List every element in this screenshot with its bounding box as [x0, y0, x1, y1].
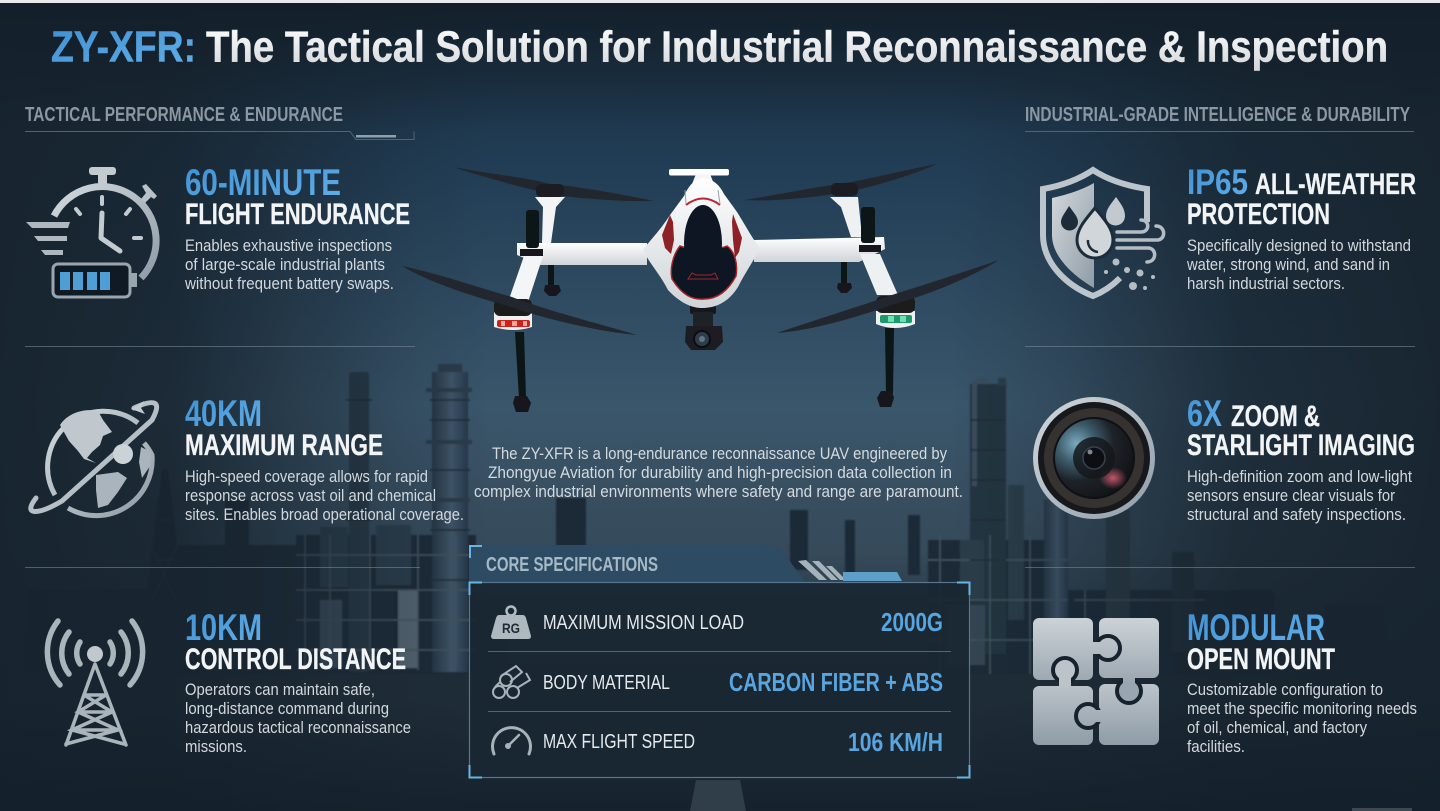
front propellers	[402, 260, 999, 335]
left column heading: TACTICAL PERFORMANCE & ENDURANCE	[25, 104, 343, 126]
top fin	[669, 169, 729, 184]
panel tab	[469, 545, 805, 582]
row: max flight speed: 106 KM/H	[848, 727, 943, 757]
icon: camera lens	[1033, 397, 1155, 519]
feature: 6x zoom and starlight imaging: structural and safety inspections.	[1187, 505, 1406, 524]
fuselage	[643, 178, 760, 308]
feature: modular open mount	[1033, 607, 1417, 756]
feature: 6x zoom and starlight imaging	[1033, 393, 1415, 524]
feature: 40km maximum range: High-speed coverage allows for rapid	[185, 467, 428, 486]
feature: 60-minute flight endurance: Enables exhaustive inspections	[185, 236, 392, 255]
front motors with position lights	[494, 296, 915, 330]
icon: radio tower	[47, 621, 143, 745]
intro paragraph: complex industrial environments where safety and range are paramount.	[474, 482, 963, 501]
row: maximum mission load: 2000G	[881, 607, 943, 637]
drone illustration	[402, 164, 999, 412]
feature: 40km maximum range	[31, 393, 464, 524]
rear propellers and motors	[453, 164, 937, 201]
feature: 10km control distance: 10KM	[185, 607, 262, 648]
feature: 60-minute flight endurance: FLIGHT ENDURANCE	[185, 198, 410, 231]
left column heading	[25, 104, 414, 140]
feature: 10km control distance: Operators can maintain safe,	[185, 680, 375, 699]
watermark remnant	[1352, 808, 1412, 811]
feature: 10km control distance: missions.	[185, 737, 247, 756]
intro paragraph: Zhongyue Aviation for durability and high-precision data collection in	[488, 463, 952, 482]
row: maximum mission load	[491, 606, 943, 639]
top white edge	[0, 0, 1440, 3]
row: body material: BODY MATERIAL	[543, 672, 670, 694]
row: maximum mission load: RG	[502, 620, 520, 636]
feature: modular open mount: of oil, chemical, and factory	[1187, 718, 1367, 737]
row: max flight speed: MAX FLIGHT SPEED	[543, 731, 695, 753]
feature: IP65 all-weather protection: water, strong wind, and sand in	[1186, 255, 1390, 274]
cross beam and front arms	[508, 207, 898, 302]
feature: 6x zoom and starlight imaging: 6X	[1187, 393, 1222, 434]
feature: IP65 all-weather protection: IP65	[1187, 163, 1248, 202]
feature: IP65 all-weather protection: harsh industrial sectors.	[1187, 274, 1345, 293]
feature: modular open mount: OPEN MOUNT	[1187, 643, 1335, 676]
row: max flight speed	[492, 727, 943, 757]
panel: core specifications	[469, 545, 970, 778]
feature: 40km maximum range: response across vast oil and chemical	[185, 486, 436, 505]
icon: stopwatch with battery	[26, 167, 157, 297]
row: body material: CARBON FIBER + ABS	[729, 667, 943, 697]
feature: 60-minute flight endurance: without frequent battery swaps.	[184, 274, 394, 293]
feature: 10km control distance: hazardous tactical reconnaissance	[185, 718, 411, 737]
title: ZY-XFR:	[51, 22, 196, 72]
feature: 10km control distance: long-distance command during	[185, 699, 389, 718]
feature: 40km maximum range: sites. Enables broad operational coverage.	[185, 505, 464, 524]
panel heading: CORE SPECIFICATIONS	[486, 554, 658, 576]
feature: 10km control distance: CONTROL DISTANCE	[185, 643, 406, 676]
feature: 60-minute flight endurance	[26, 162, 410, 297]
feature: 6x zoom and starlight imaging: ZOOM &	[1231, 400, 1320, 433]
intro paragraph: The ZY-XFR is a long-endurance reconnaissance UAV engineered by	[492, 444, 947, 463]
feature: IP65 all-weather protection	[1043, 163, 1416, 296]
feature: 6x zoom and starlight imaging: High-definition zoom and low-light	[1187, 467, 1412, 486]
row: maximum mission load: MAXIMUM MISSION LOAD	[543, 612, 744, 634]
feature: modular open mount: MODULAR	[1187, 607, 1325, 648]
icon: puzzle pieces	[1033, 618, 1159, 745]
front legs	[513, 328, 894, 412]
feature: 60-minute flight endurance: 60-MINUTE	[185, 162, 341, 203]
icon: shield with water, wind and sand	[1043, 170, 1164, 296]
feature: 10km control distance	[47, 607, 411, 756]
feature: IP65 all-weather protection: PROTECTION	[1187, 198, 1330, 231]
panel body	[470, 582, 970, 778]
icon: globe with orbit	[31, 401, 157, 516]
row: body material	[493, 666, 943, 698]
gimbal camera	[685, 302, 723, 350]
feature: modular open mount: facilities.	[1187, 737, 1245, 756]
feature: IP65 all-weather protection: Specifically designed to withstand	[1187, 236, 1411, 255]
feature: 60-minute flight endurance: of large-scale industrial plants	[185, 255, 385, 274]
feature: 6x zoom and starlight imaging: sensors ensure clear visuals for	[1187, 486, 1395, 505]
rear legs and arms	[535, 197, 862, 296]
feature: 40km maximum range: 40KM	[185, 393, 262, 434]
intro paragraph	[474, 444, 963, 501]
feature: modular open mount: Customizable configuration to	[1187, 680, 1383, 699]
feature: 40km maximum range: MAXIMUM RANGE	[185, 429, 383, 462]
